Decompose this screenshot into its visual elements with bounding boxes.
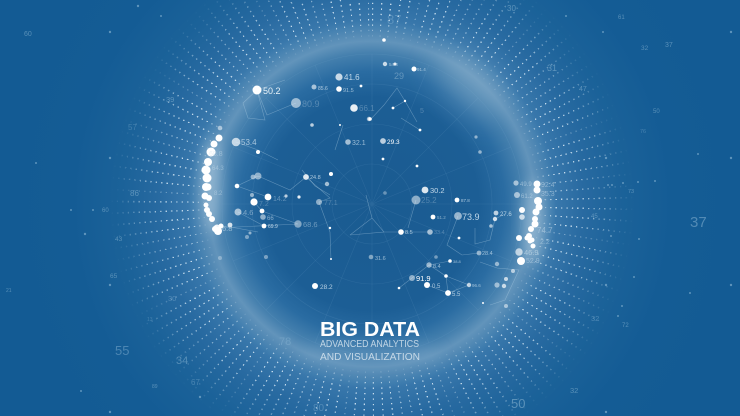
node value labels: 14.2 — [273, 196, 287, 203]
node value labels: 28.4 — [482, 251, 493, 257]
background scattered numbers: 60 — [24, 31, 32, 38]
node value labels: 5 — [420, 108, 424, 115]
node value labels: 53.4 — [241, 138, 257, 147]
node value labels: 38.8 — [453, 259, 462, 264]
node value labels: 7.2 — [259, 201, 269, 208]
background scattered numbers: 30 — [507, 4, 516, 13]
node value labels: 74.7 — [537, 226, 553, 235]
node value labels: 31.6 — [375, 256, 386, 262]
node value labels: 5.5 — [452, 292, 461, 298]
node value labels: 66 — [267, 216, 274, 222]
subtitle: advanced analytics and visualization — [320, 338, 420, 363]
node value labels: 46.9 — [524, 248, 539, 257]
constellation lines — [217, 80, 519, 305]
node value labels: 41.6 — [344, 73, 360, 82]
node value labels: 8.4 — [433, 264, 441, 270]
background scattered numbers: 34 — [176, 355, 188, 367]
background scattered numbers: 72 — [622, 323, 629, 329]
background scattered numbers: 89 — [152, 384, 158, 390]
glow: right edge — [523, 180, 543, 264]
glow: left edge — [202, 137, 222, 233]
bright left edge cluster — [202, 134, 224, 235]
node value labels: 29.3 — [387, 139, 400, 146]
node value labels: 4.6 — [243, 208, 253, 217]
background scattered numbers: 86 — [130, 189, 139, 198]
node value labels: 49.9 — [520, 182, 532, 188]
background scattered numbers: 47 — [579, 86, 587, 93]
node value labels: 87.8 — [461, 198, 470, 203]
background scattered numbers: 37 — [665, 42, 673, 49]
node value labels: 8.2 — [214, 191, 223, 197]
node value labels: 33.4 — [434, 230, 445, 236]
polar grid — [222, 54, 522, 354]
node value labels: 91.9 — [416, 274, 431, 283]
subtitle: advanced analytics and visualization: AND VISUALIZATION — [320, 351, 420, 363]
background scattered numbers: 50 — [653, 109, 660, 115]
background scattered numbers: 61 — [618, 15, 625, 21]
data nodes: left sphere — [214, 172, 333, 289]
node value labels: 69.9 — [268, 224, 278, 230]
background scattered numbers: 73 — [628, 189, 634, 195]
background scattered numbers: 78 — [279, 336, 291, 348]
background scattered numbers: 37 — [690, 214, 707, 231]
node value labels: 68.6 — [303, 220, 318, 229]
background scattered numbers: 39 — [166, 95, 174, 104]
node value labels: 27.6 — [500, 212, 512, 218]
subtitle: advanced analytics and visualization: ADVANCED ANALYTICS — [320, 338, 419, 350]
node value labels: 8.5 — [405, 230, 413, 236]
background scattered numbers: 30 — [168, 294, 176, 303]
node value labels: 68.8 — [209, 151, 223, 158]
bright right edge cluster — [516, 180, 542, 248]
background scattered numbers: 50 — [511, 396, 525, 411]
radial dotted rays around the sphere — [117, 0, 627, 416]
background scattered numbers: 57 — [128, 123, 137, 132]
node value labels: 91.5 — [343, 88, 354, 94]
background scattered numbers: 60 — [102, 208, 109, 214]
node value labels: 92.4 — [541, 182, 555, 189]
node value labels: 28.2 — [320, 284, 333, 291]
background scattered numbers: 32 — [641, 45, 649, 52]
node value labels: 6.8 — [222, 224, 232, 233]
title: BIG DATA: BIG DATA — [320, 318, 420, 341]
background scattered numbers: 21 — [6, 288, 12, 294]
node value labels: 80.9 — [302, 99, 320, 109]
background scattered numbers: 55 — [115, 343, 129, 358]
background scattered numbers: 43 — [115, 236, 123, 243]
background scattered numbers: 67 — [191, 378, 200, 387]
node value labels: 50.2 — [263, 86, 281, 96]
node value labels — [209, 62, 555, 298]
node value labels: 25.2 — [421, 196, 437, 205]
node value labels: 0.5 — [432, 284, 441, 290]
node value labels: 54.3 — [389, 62, 398, 67]
node value labels: 66.1 — [359, 104, 375, 113]
node value labels: 2.2 — [540, 239, 550, 246]
glow: upper right of sphere — [425, 40, 515, 130]
background scattered numbers: 80 — [313, 403, 325, 414]
node value labels: 35.3 — [541, 191, 555, 198]
background scattered numbers: 45 — [591, 214, 598, 220]
background scattered numbers: 31 — [547, 63, 557, 73]
data nodes: upper sphere — [218, 38, 482, 167]
node value labels: 52.9 — [526, 258, 540, 265]
node value labels: 24.8 — [310, 175, 321, 181]
background scattered numbers: 13 — [147, 317, 153, 323]
node value labels: 77.1 — [324, 200, 338, 207]
background scattered numbers: 32 — [591, 314, 599, 323]
sphere disc — [188, 20, 556, 388]
background scattered numbers: 87 — [387, 12, 401, 27]
node value labels: 61.2 — [521, 194, 533, 200]
node value labels: 30.2 — [430, 186, 445, 195]
node value labels: 29 — [394, 71, 404, 81]
node value labels: 64.3 — [212, 166, 224, 172]
node value labels: 91.4 — [417, 67, 426, 72]
background scattered numbers: 32 — [570, 386, 578, 395]
background scattered numbers: 76 — [640, 129, 646, 135]
glow: lower sphere — [302, 342, 442, 362]
data nodes: right sphere — [369, 180, 525, 308]
node value labels: 96.6 — [472, 283, 481, 288]
node value labels: 85.6 — [318, 86, 328, 92]
background scattered numbers: 65 — [110, 273, 118, 280]
node value labels: 32.1 — [352, 140, 366, 147]
node value labels: 73.9 — [462, 212, 480, 222]
node value labels: 51.2 — [437, 215, 446, 220]
